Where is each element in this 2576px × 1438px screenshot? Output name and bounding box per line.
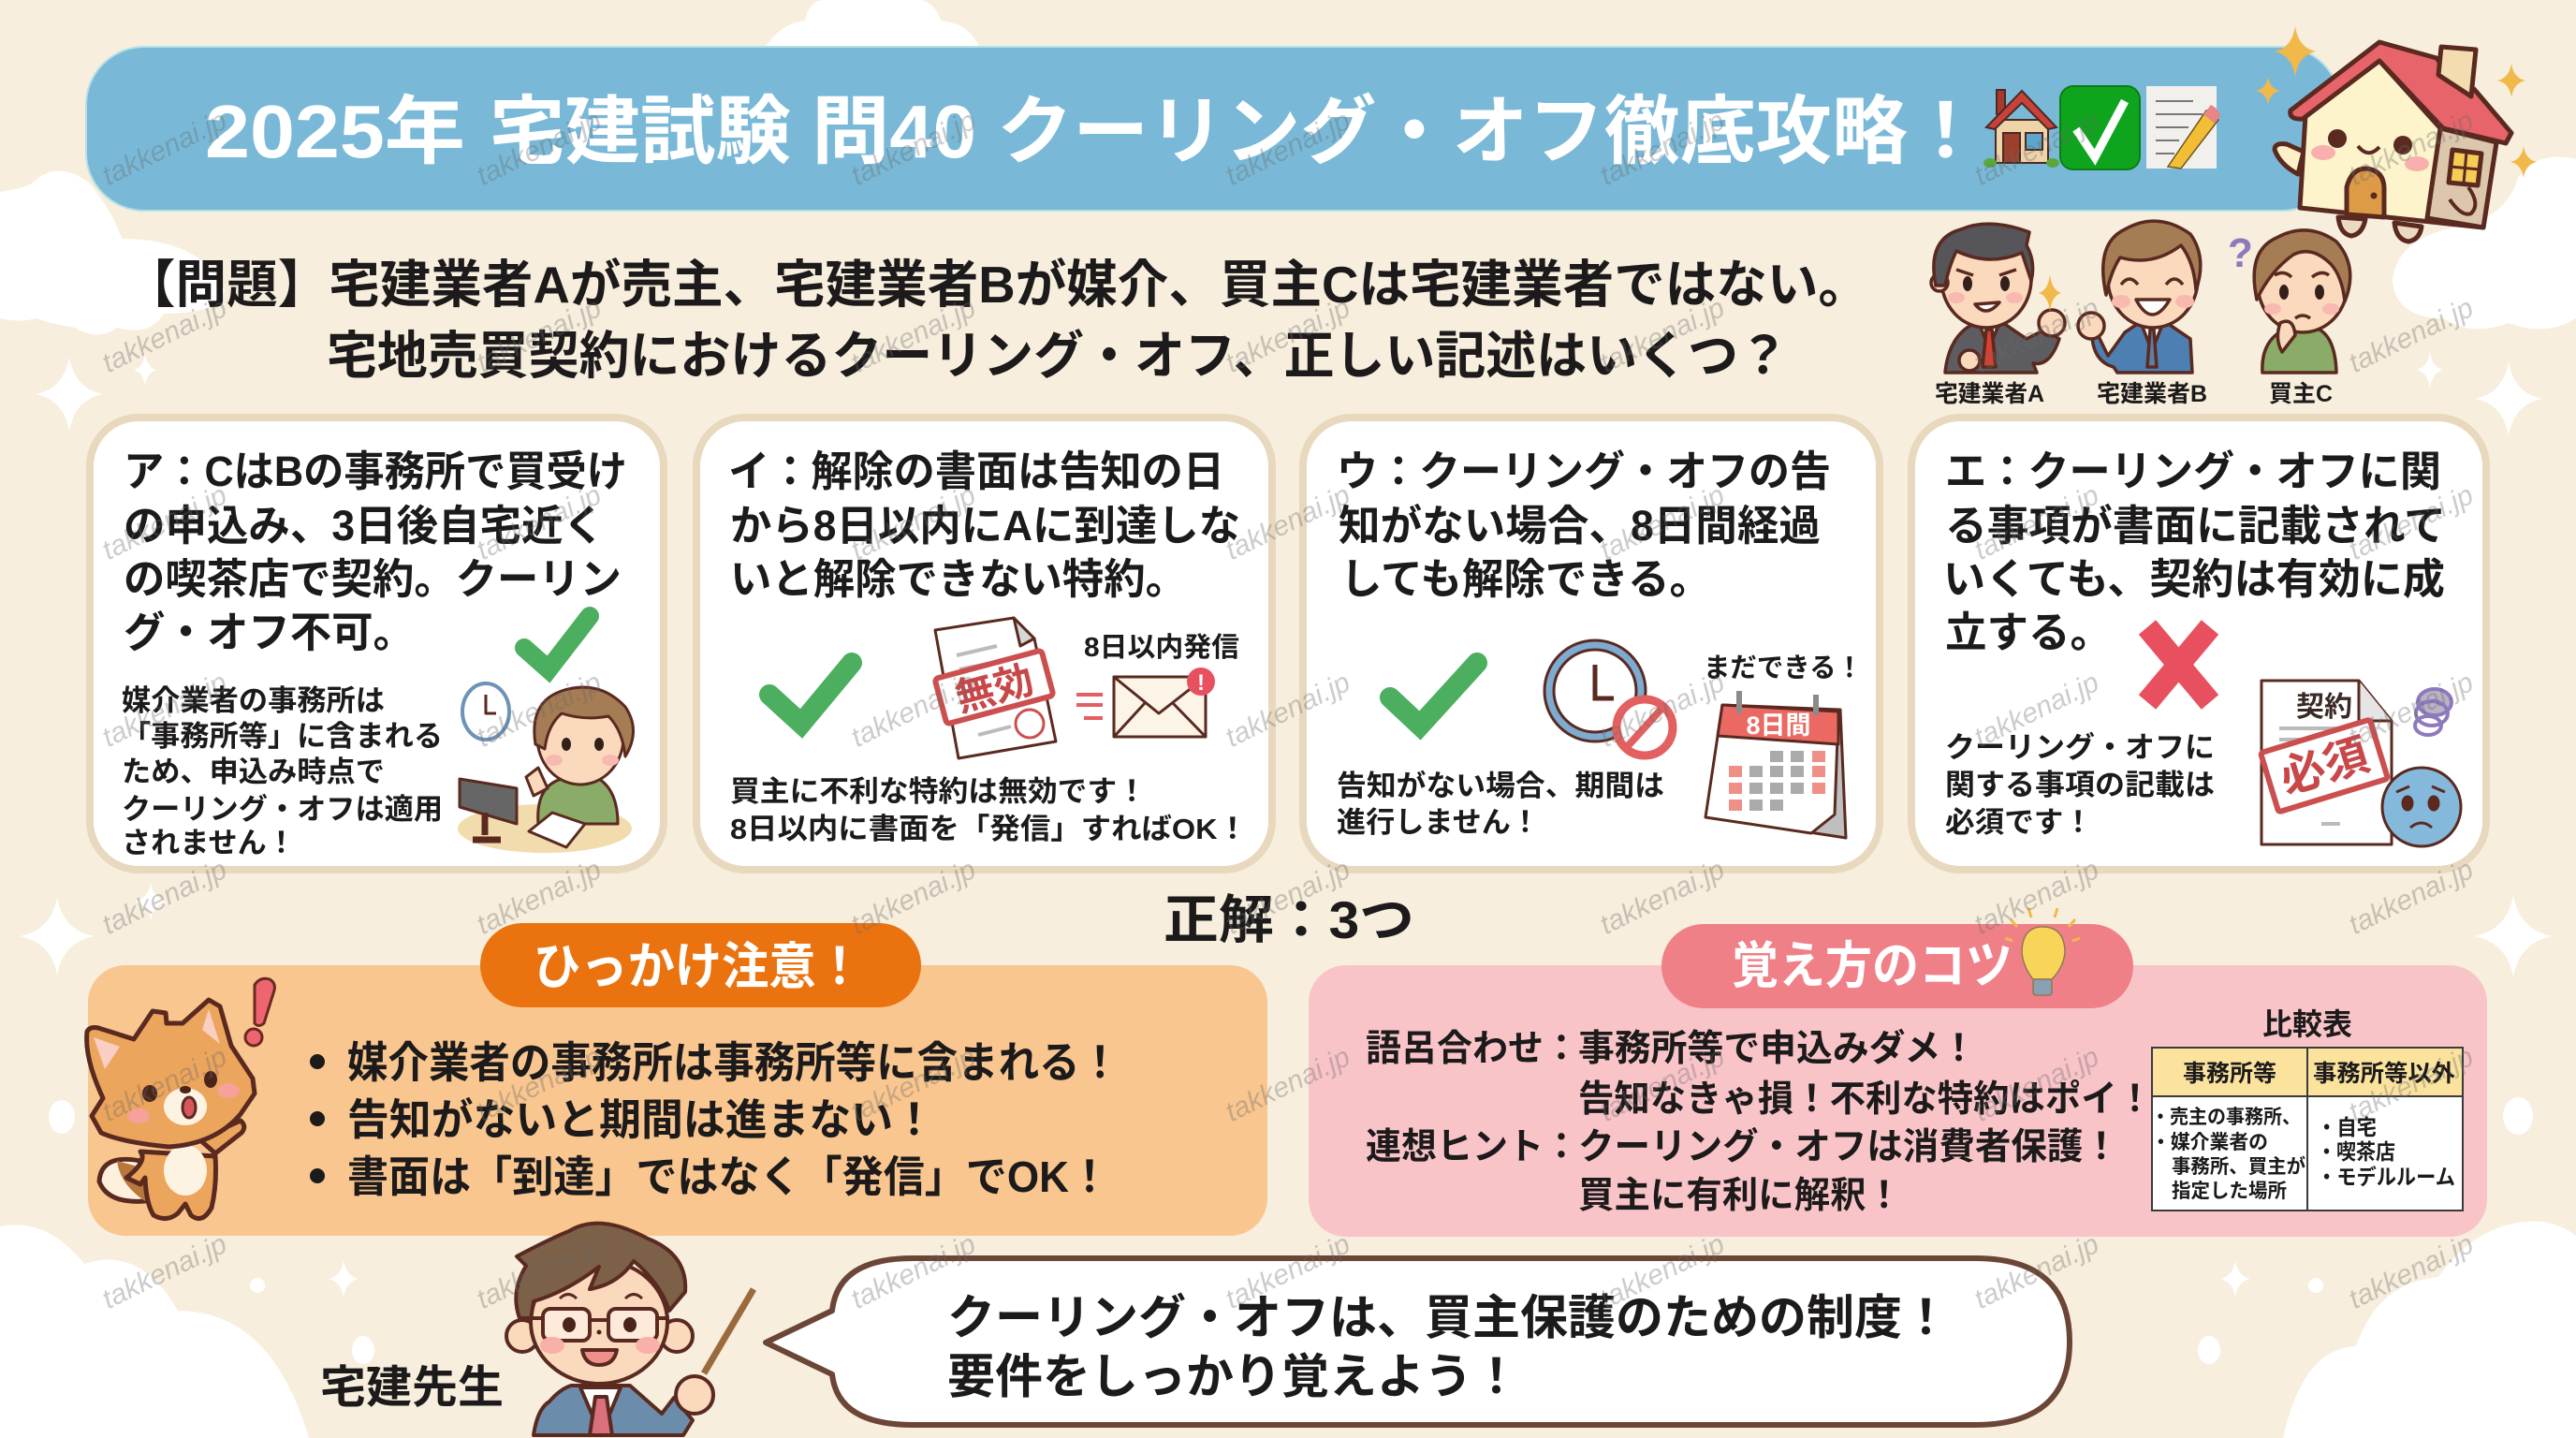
statement ウ heading text: ウ：クーリング・オフの告	[1337, 448, 1831, 495]
icon: calendar 8 days	[1705, 691, 1846, 838]
comparison table: ・売主の事務所、	[2151, 1106, 2301, 1128]
watermarks: takkenai.jp	[1969, 479, 2104, 566]
icon: contract with mandatory stamp: 必須	[2275, 730, 2375, 804]
comparison table heading: 比較表	[2262, 1007, 2352, 1041]
statement ア heading text: の喫茶店で契約。クーリン	[124, 555, 622, 603]
mnemonic text	[1366, 1029, 2153, 1216]
pill heading: memory tips	[1661, 924, 2133, 1008]
watermarks: takkenai.jp	[97, 1228, 232, 1315]
statement イ heading text: イ：解除の書面は告知の日	[728, 448, 1224, 495]
watermarks: takkenai.jp	[2344, 667, 2479, 754]
question text: 宅地売買契約におけるクーリング・オフ、正しい記述はいくつ？	[327, 327, 1789, 385]
character: real estate agent B	[2078, 221, 2201, 373]
icon: contract with mandatory stamp	[2261, 681, 2392, 844]
panel: statement ウ	[1303, 418, 1880, 870]
watermarks: takkenai.jp	[472, 667, 607, 754]
statement イ explanation	[730, 775, 1248, 845]
comparison table: 事務所、買主が	[2172, 1155, 2305, 1178]
watermarks: takkenai.jp	[2344, 105, 2479, 192]
panel: statement イ	[696, 418, 1272, 870]
watermarks: takkenai.jp	[97, 854, 232, 941]
icon: red exclamation mark	[245, 978, 274, 1046]
icon: clock with prohibition sign	[1544, 640, 1673, 756]
panel: statement エ	[1911, 418, 2486, 870]
watermarks: takkenai.jp	[97, 105, 232, 192]
panel: statement ア	[90, 418, 664, 870]
watermarks: takkenai.jp	[846, 854, 981, 941]
label: send within 8 days: 8日以内発信	[1084, 632, 1239, 663]
speech bubble: クーリング・オフは、買主保護のための制度！	[947, 1291, 1950, 1344]
watermarks: takkenai.jp	[2344, 1228, 2479, 1315]
answer: 正解：3つ	[1164, 890, 1414, 949]
icon: calendar 8 days: 8日間	[1746, 712, 1811, 740]
illustration: person at computer with clock	[458, 683, 633, 853]
statement エ explanation	[1945, 731, 2215, 839]
statement エ heading text: 立する。	[1945, 609, 2112, 656]
watermarks: takkenai.jp	[1595, 479, 1730, 566]
watermarks: takkenai.jp	[1969, 105, 2104, 192]
watermarks: takkenai.jp	[2344, 854, 2479, 941]
statement ア explanation: 媒介業者の事務所は	[122, 684, 385, 717]
comparison table	[2151, 1048, 2463, 1211]
watermarks: takkenai.jp	[2344, 1041, 2479, 1128]
icon: void document with stamp: 無効	[951, 657, 1038, 720]
label: still possible: まだできる！	[1704, 653, 1863, 683]
speech bubble: 要件をしっかり覚えよう！	[947, 1350, 1520, 1403]
trap warning list: 媒介業者の事務所は事務所等に含まれる！	[347, 1038, 1120, 1087]
title banner	[86, 47, 2340, 211]
watermarks: takkenai.jp	[1221, 1228, 1355, 1315]
watermarks: takkenai.jp	[1969, 1228, 2104, 1315]
title text: 宅建試験	[490, 90, 791, 173]
mnemonic text: 買主に有利に解釈！	[1578, 1176, 1902, 1216]
statement エ heading text: いくても、契約は有効に成	[1943, 555, 2445, 603]
watermarks: takkenai.jp	[1595, 854, 1730, 941]
panel: trap warning	[87, 923, 1267, 1236]
mnemonic text: 語呂合わせ：	[1366, 1029, 1579, 1069]
question text: 【問題】宅建業者Aが売主、宅建業者Bが媒介、買主Cは宅建業者ではない。	[124, 256, 1869, 314]
character: buyer C	[2228, 230, 2350, 373]
comparison table: 事務所等	[2183, 1061, 2276, 1087]
watermarks: takkenai.jp	[1221, 1041, 1355, 1128]
watermarks: takkenai.jp	[1595, 105, 1730, 192]
comparison table: 指定した場所	[2172, 1181, 2287, 1202]
icon: purple swirl	[2415, 689, 2452, 735]
watermarks: takkenai.jp	[2344, 479, 2479, 566]
house mascot	[2275, 42, 2511, 242]
watermarks: takkenai.jp	[472, 1041, 607, 1128]
watermarks: takkenai.jp	[1595, 1041, 1730, 1128]
icon: envelope with alert: !	[1197, 670, 1205, 696]
mnemonic text: クーリング・オフは消費者保護！	[1578, 1127, 2119, 1167]
statement エ explanation: 関する事項の記載は	[1945, 769, 2215, 801]
watermarks: takkenai.jp	[1969, 667, 2104, 754]
statement エ explanation: クーリング・オフに	[1945, 731, 2215, 764]
comparison table: ・喫茶店	[2317, 1139, 2395, 1164]
character name labels: 宅建業者B	[2097, 381, 2207, 407]
watermarks: takkenai.jp	[846, 292, 981, 379]
icon: memo and pencil emoji	[2146, 86, 2220, 169]
icon: worried blue face	[2382, 768, 2461, 846]
watermarks: takkenai.jp	[472, 854, 607, 941]
icon: void document with stamp	[935, 618, 1056, 758]
statement ウ heading text: 知がない場合、8日間経過	[1339, 502, 1821, 550]
statement ウ heading text	[1337, 448, 1831, 603]
watermarks: takkenai.jp	[472, 292, 607, 379]
watermarks: takkenai.jp	[97, 667, 232, 754]
statement ウ explanation	[1337, 770, 1664, 839]
statement ウ heading text: しても解除できる。	[1340, 555, 1711, 603]
statement エ heading text: る事項が書面に記載されて	[1945, 502, 2446, 550]
character: real estate agent A	[1931, 224, 2065, 373]
statement エ explanation: 必須です！	[1945, 806, 2093, 839]
watermarks: takkenai.jp	[846, 667, 981, 754]
title text: 2025年	[205, 90, 465, 173]
statement ア heading text: グ・オフ不可。	[124, 609, 415, 656]
character name labels: 買主C	[2269, 381, 2333, 407]
comparison table: ・モデルルーム	[2317, 1165, 2455, 1189]
title text: クーリング・オフ徹底攻略！	[997, 90, 1983, 173]
statement ア heading text	[124, 448, 627, 656]
watermarks: takkenai.jp	[846, 1041, 981, 1128]
statement イ heading text	[728, 448, 1240, 603]
icon: green check box emoji	[2060, 86, 2140, 169]
icon: red cross	[2147, 627, 2210, 702]
watermarks: takkenai.jp	[1969, 292, 2104, 379]
statement ア explanation: ため、申込み時点で	[122, 756, 385, 788]
watermarks: takkenai.jp	[97, 1041, 232, 1128]
comparison table: ・媒介業者の	[2151, 1132, 2268, 1153]
watermarks: takkenai.jp	[472, 1228, 607, 1315]
character: teacher with pointer	[506, 1224, 754, 1435]
watermarks: takkenai.jp	[2344, 292, 2479, 379]
watermarks: takkenai.jp	[472, 105, 607, 192]
teacher name label: 宅建先生	[320, 1363, 504, 1413]
watermarks: takkenai.jp	[1221, 667, 1355, 754]
statement ア heading text: ア：CはBの事務所で買受け	[124, 448, 627, 495]
watermarks: takkenai.jp	[1221, 105, 1355, 192]
icon: green check	[1390, 663, 1477, 726]
statement イ heading text: から8日以内にAに到達しな	[730, 502, 1240, 550]
watermarks: takkenai.jp	[1221, 854, 1355, 941]
title text	[205, 90, 1983, 173]
speech bubble	[766, 1258, 2070, 1425]
watermarks: takkenai.jp	[1221, 479, 1355, 566]
statement イ heading text: いと解除できない特約。	[730, 555, 1187, 603]
statement ウ explanation: 進行しません！	[1337, 806, 1540, 839]
watermarks: takkenai.jp	[1969, 1041, 2104, 1128]
icon: contract with mandatory stamp: 契約	[2296, 692, 2352, 723]
mnemonic text: 事務所等で申込みダメ！	[1578, 1029, 1977, 1069]
pill heading: trap warning: ひっかけ注意！	[534, 939, 863, 995]
watermarks: takkenai.jp	[846, 1228, 981, 1315]
statement ア heading text: の申込み、3日後自宅近く	[124, 502, 605, 550]
watermarks: takkenai.jp	[1221, 292, 1355, 379]
icon: envelope with alert	[1076, 668, 1215, 737]
title text: 問40	[812, 90, 976, 173]
mnemonic text: 連想ヒント：	[1366, 1127, 1579, 1167]
statement エ heading text	[1943, 448, 2446, 656]
watermarks: takkenai.jp	[1595, 667, 1730, 754]
watermarks: takkenai.jp	[1969, 854, 2104, 941]
statement ウ explanation: 告知がない場合、期間は	[1337, 770, 1664, 802]
icon: green check	[524, 616, 590, 669]
statement イ explanation: 8日以内に書面を「発信」すればOK！	[730, 813, 1248, 845]
pill heading: memory tips: 覚え方のコツ	[1732, 938, 2012, 994]
statement ア explanation	[122, 684, 443, 859]
character: buyer C: ?	[2228, 230, 2253, 276]
gold sparkles around house	[2256, 26, 2537, 178]
statement ア explanation: クーリング・オフは適用	[122, 793, 443, 826]
watermarks: takkenai.jp	[472, 479, 607, 566]
mascot: fox	[87, 1000, 255, 1219]
icon: light bulb	[2005, 908, 2080, 995]
trap warning list	[310, 1038, 1120, 1201]
mnemonic text: 告知なきゃ損！不利な特約はポイ！	[1578, 1079, 2153, 1120]
comparison table: ・自宅	[2317, 1115, 2377, 1139]
pill heading: trap warning	[480, 923, 921, 1007]
comparison table: 事務所等以外	[2313, 1061, 2455, 1087]
watermarks: takkenai.jp	[1595, 1228, 1730, 1315]
watermarks: takkenai.jp	[97, 292, 232, 379]
watermarks: takkenai.jp	[846, 479, 981, 566]
icon: house emoji	[1983, 90, 2059, 168]
statement ア explanation: されません！	[122, 827, 296, 859]
panel: memory tips	[1309, 908, 2487, 1237]
statement エ heading text: エ：クーリング・オフに関	[1945, 448, 2441, 495]
question text	[124, 256, 1869, 385]
trap warning list: 告知がないと期間は進まない！	[347, 1095, 935, 1144]
watermarks: takkenai.jp	[1595, 292, 1730, 379]
statement ア explanation: 「事務所等」に含まれる	[122, 720, 443, 753]
watermarks: takkenai.jp	[97, 479, 232, 566]
statement イ explanation: 買主に不利な特約は無効です！	[730, 775, 1147, 808]
character name labels	[1935, 381, 2333, 407]
watermarks: takkenai.jp	[846, 105, 981, 192]
character name labels: 宅建業者A	[1935, 381, 2044, 407]
icon: green check	[769, 663, 852, 724]
trap warning list: 書面は「到達」ではなく「発信」でOK！	[347, 1152, 1110, 1201]
